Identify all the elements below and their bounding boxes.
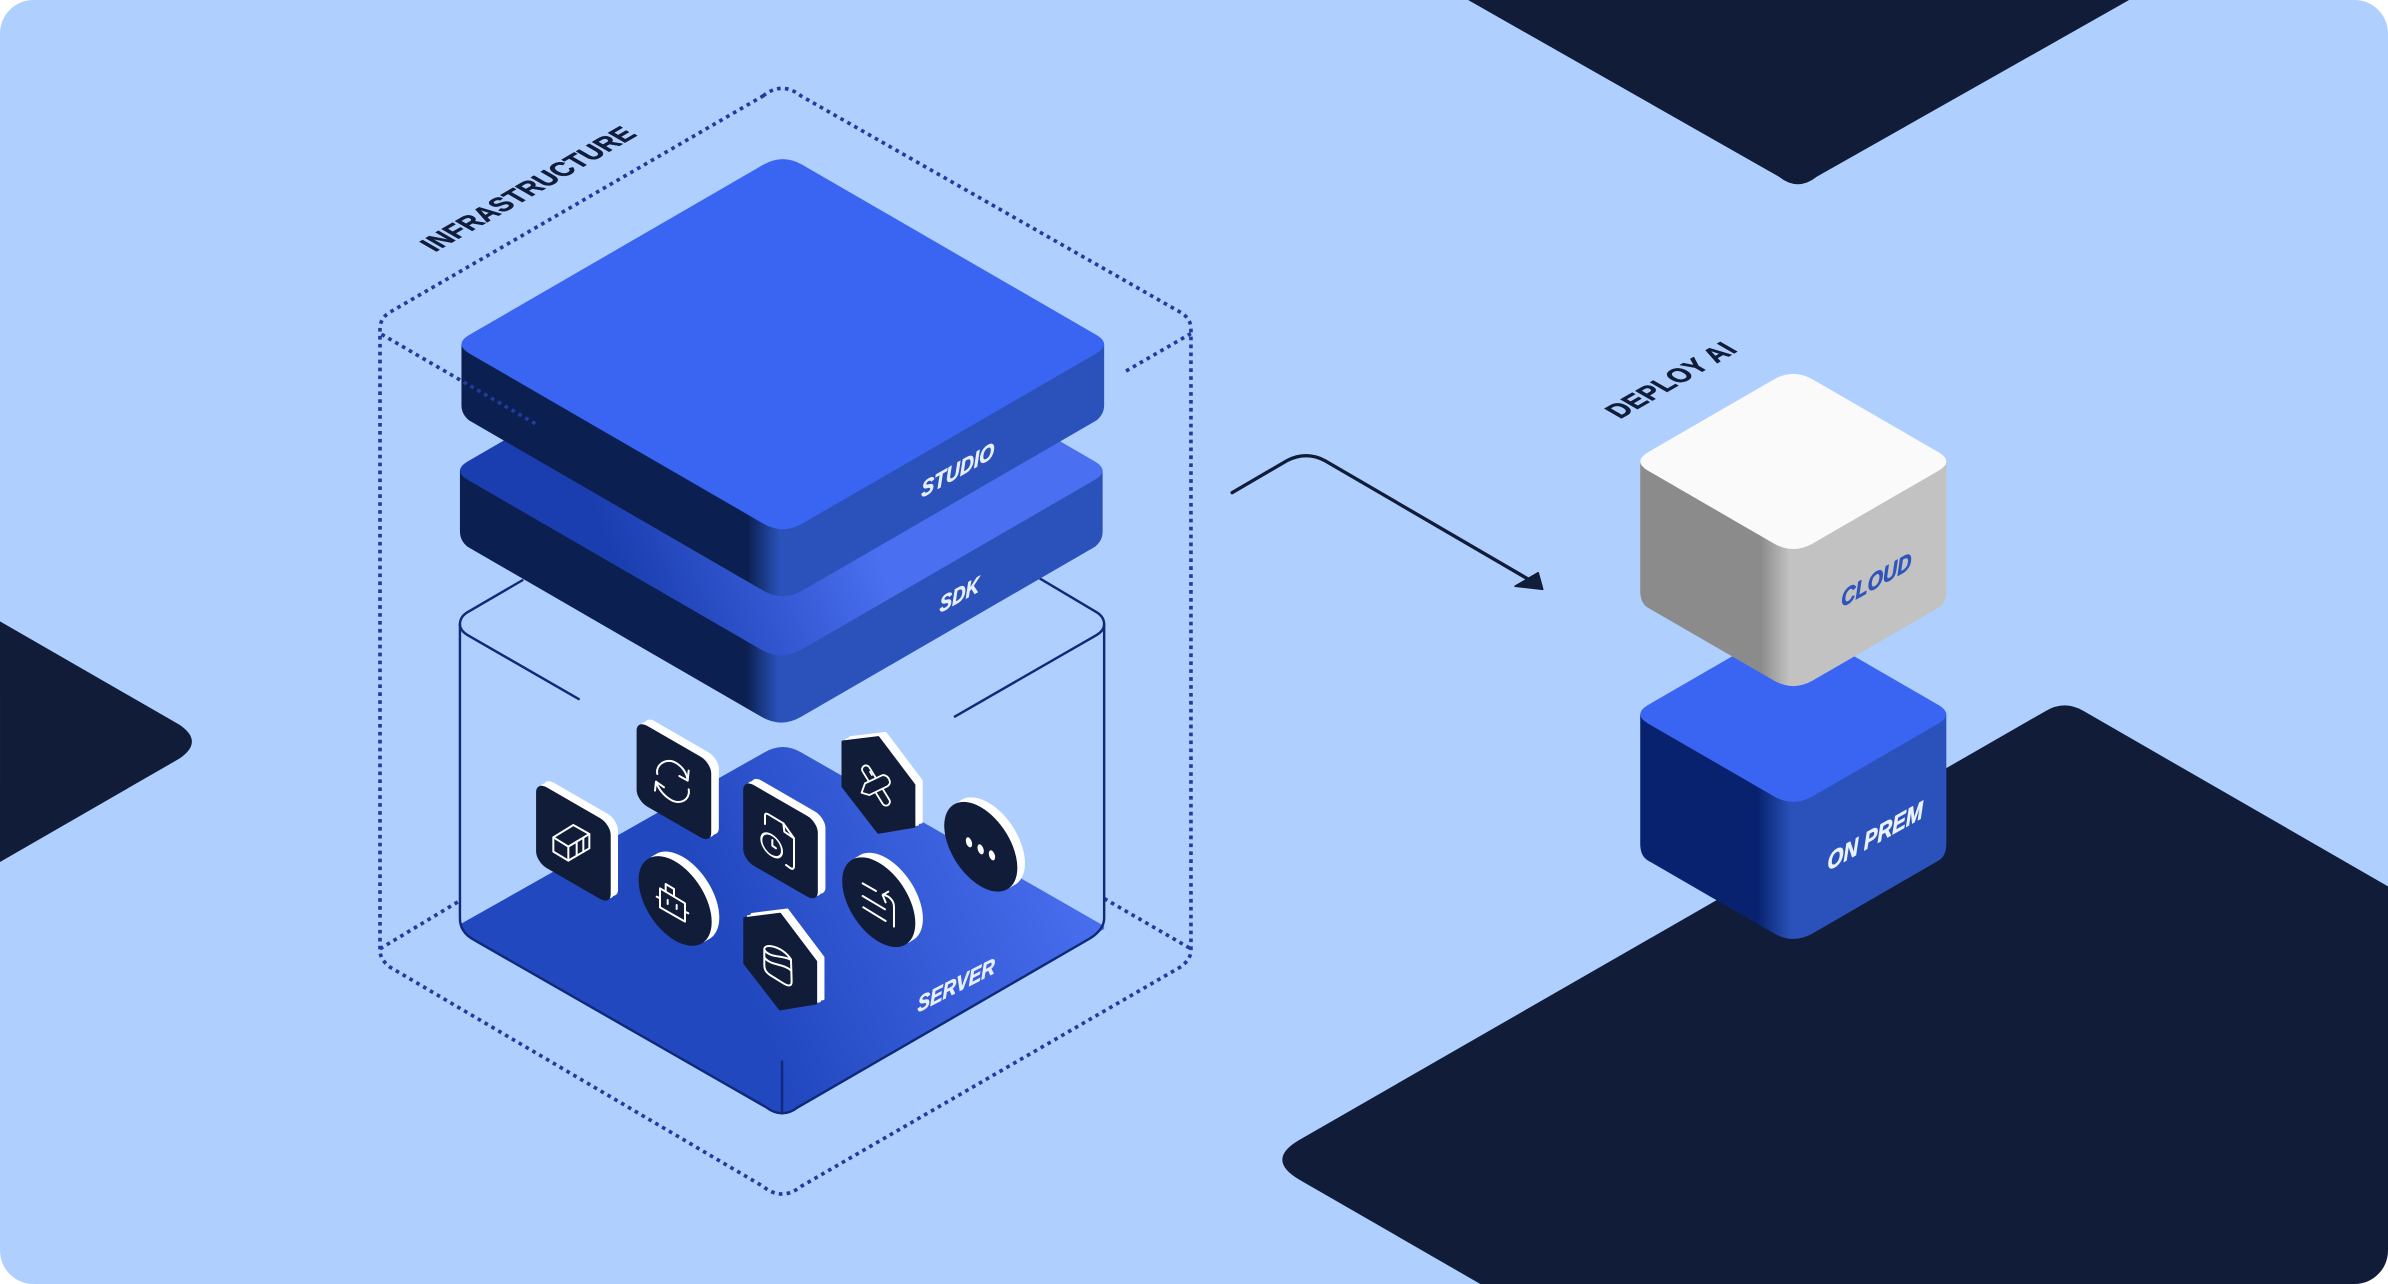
cube: ON PREM <box>1640 627 1946 939</box>
arrow: infrastructure to deploy <box>1232 456 1543 589</box>
heading: INFRASTRUCTURE: INFRASTRUCTURE <box>413 122 644 256</box>
server floor <box>460 747 1104 1113</box>
icon tile: database <box>744 910 823 1009</box>
dark shape: top <box>1468 0 2129 184</box>
label: ON PREM: ON PREM <box>1828 796 1924 877</box>
icon tile: more dots <box>944 782 1025 907</box>
label: CLOUD: CLOUD <box>1841 547 1911 613</box>
label: STUDIO: STUDIO <box>921 437 994 503</box>
block: SDK <box>460 286 1103 723</box>
icon tile: box <box>536 777 618 905</box>
icon tile: list with return arrow <box>842 837 923 963</box>
label: SERVER: SERVER <box>918 953 995 1018</box>
icon tile: wrench and ruler <box>843 733 922 833</box>
dotted line over studio block <box>382 334 536 424</box>
dark shape: bottom right <box>1282 705 2388 1284</box>
cube: CLOUD <box>1640 374 1946 686</box>
heading: DEPLOY AI: DEPLOY AI <box>1598 338 1744 422</box>
block: STUDIO <box>461 159 1104 596</box>
icon tile: document clock <box>743 774 825 903</box>
dark shape: left <box>0 621 192 862</box>
dotted infrastructure outline <box>380 88 1191 1194</box>
label: SDK: SDK <box>940 571 981 618</box>
server glass box outline <box>460 579 1104 1113</box>
icon tile: refresh <box>637 715 719 844</box>
icon tile: bot <box>639 836 719 962</box>
